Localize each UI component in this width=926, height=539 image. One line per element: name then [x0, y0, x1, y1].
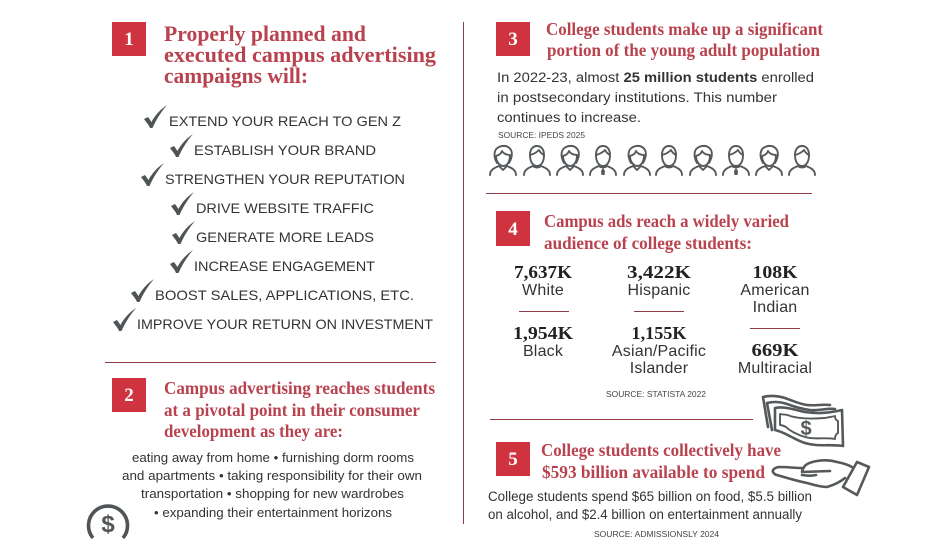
stat: black: 1,954K [513, 323, 573, 343]
icon: dollar coin [89, 506, 128, 538]
stat: black [513, 323, 573, 360]
stat: white: White [522, 282, 564, 299]
heading: section 1 [164, 21, 437, 88]
item: more leads: GENERATE MORE LEADS [196, 229, 374, 245]
panel: section 1 campaign benefits [112, 21, 437, 332]
heading: section 2: at a pivotal point in their consumer [164, 400, 420, 420]
text block: spending: on alcohol, and $2.4 billion on entertainment annually [488, 507, 802, 522]
item: more leads [172, 221, 374, 245]
stat: american indian [740, 262, 810, 316]
heading: section 3: portion of the young adult population [547, 40, 820, 60]
text block: spending [488, 489, 812, 522]
heading: section 4 [544, 211, 789, 253]
heading: section 4: Campus ads reach a widely varied [544, 211, 789, 231]
item: return on investment: IMPROVE YOUR RETURN ON INVESTMENT [137, 316, 433, 332]
badge: number 4: 4 [508, 219, 518, 240]
stat: multiracial: Multiracial [738, 360, 812, 377]
badge: number 2 [112, 378, 146, 412]
icon: banknotes: $ [800, 418, 812, 440]
stat: multiracial [738, 340, 812, 377]
item: boost sales: BOOST SALES, APPLICATIONS, ETC. [155, 287, 414, 303]
heading: section 3 [546, 19, 823, 60]
panel: section 2 pivotal point [89, 378, 435, 538]
item: establish brand [170, 134, 376, 158]
text block: life changes: and apartments • taking responsibility for their own [122, 469, 422, 483]
icon: banknotes [763, 396, 843, 446]
panel: section 5 spending [488, 396, 869, 539]
panel: section 4 audience [496, 211, 812, 399]
item: website traffic: DRIVE WEBSITE TRAFFIC [196, 200, 374, 216]
stat: hispanic: Hispanic [628, 282, 690, 299]
item: extend reach [144, 105, 401, 129]
item: extend reach: EXTEND YOUR REACH TO GEN Z [169, 113, 401, 129]
text block: enrollment [497, 70, 814, 125]
item: strengthen reputation [141, 163, 405, 187]
text block: life changes: transportation • shopping for new wardrobes [141, 487, 404, 501]
badge: number 2: 2 [124, 385, 134, 406]
item: establish brand: ESTABLISH YOUR BRAND [194, 142, 376, 158]
heading: section 1: Properly planned and [164, 21, 366, 46]
stat: american indian: 108K [752, 262, 798, 282]
text block: life changes: • expanding their entertainment horizons [154, 506, 392, 520]
badge: number 5 [496, 442, 530, 476]
heading: section 2 [164, 378, 435, 441]
heading: section 3: College students make up a significant [546, 19, 823, 39]
icon: open hand [773, 460, 869, 495]
source: admissionsly: SOURCE: ADMISSIONSLY 2024 [594, 530, 720, 539]
source: ipeds: SOURCE: IPEDS 2025 [498, 131, 586, 140]
heading: section 2: Campus advertising reaches students [164, 378, 435, 398]
text block: spending: College students spend $65 billion on food, $5.5 billion [488, 489, 812, 504]
icon row: ten students [490, 146, 815, 175]
text block: enrollment: in postsecondary institutions. This number [497, 90, 778, 105]
heading: section 1: campaigns will: [164, 63, 308, 88]
item: engagement: INCREASE ENGAGEMENT [194, 258, 375, 274]
badge: number 5: 5 [508, 449, 518, 470]
heading: section 5: College students collectively have [541, 440, 781, 460]
item: website traffic [171, 192, 374, 216]
stat: multiracial: 669K [752, 340, 798, 360]
text block: enrollment: In 2022-23, almost 25 million students enrolled [497, 70, 814, 85]
stat: asian pacific islander [612, 323, 706, 377]
item: strengthen reputation: STRENGTHEN YOUR REPUTATION [165, 171, 405, 187]
stat: black: Black [523, 343, 564, 360]
source: statista: SOURCE: STATISTA 2022 [606, 390, 707, 399]
heading: section 5: $593 billion available to spend [542, 462, 765, 482]
badge: number 3 [496, 22, 530, 56]
heading: section 2: development as they are: [164, 421, 343, 441]
item: return on investment [113, 308, 433, 332]
heading: section 4: audience of college students: [544, 233, 752, 253]
stat: asian pacific islander: Islander [630, 360, 689, 377]
panel: section 3 young adult population [490, 19, 823, 175]
item: engagement [170, 250, 375, 274]
stat: asian pacific islander: 1,155K [632, 323, 686, 343]
icon: dollar coin: $ [101, 511, 115, 538]
stat: hispanic [627, 262, 691, 299]
badge: number 1: 1 [124, 29, 134, 50]
stat: asian pacific islander: Asian/Pacific [612, 343, 706, 360]
stat: american indian: Indian [753, 299, 797, 316]
stat: hispanic: 3,422K [627, 262, 691, 282]
badge: number 4 [496, 211, 530, 246]
item: boost sales [131, 279, 414, 303]
text block: enrollment: continues to increase. [497, 110, 641, 125]
text block: life changes [122, 451, 422, 520]
stat: american indian: American [740, 282, 810, 299]
badge: number 1 [112, 22, 146, 56]
heading: section 1: executed campus advertising [164, 42, 437, 67]
stat: white: 7,637K [514, 262, 572, 282]
text block: life changes: eating away from home • furnishing dorm rooms [132, 451, 414, 465]
stat: white [514, 262, 572, 299]
badge: number 3: 3 [508, 29, 518, 50]
checklist [113, 105, 433, 332]
heading: section 5 [541, 440, 781, 482]
